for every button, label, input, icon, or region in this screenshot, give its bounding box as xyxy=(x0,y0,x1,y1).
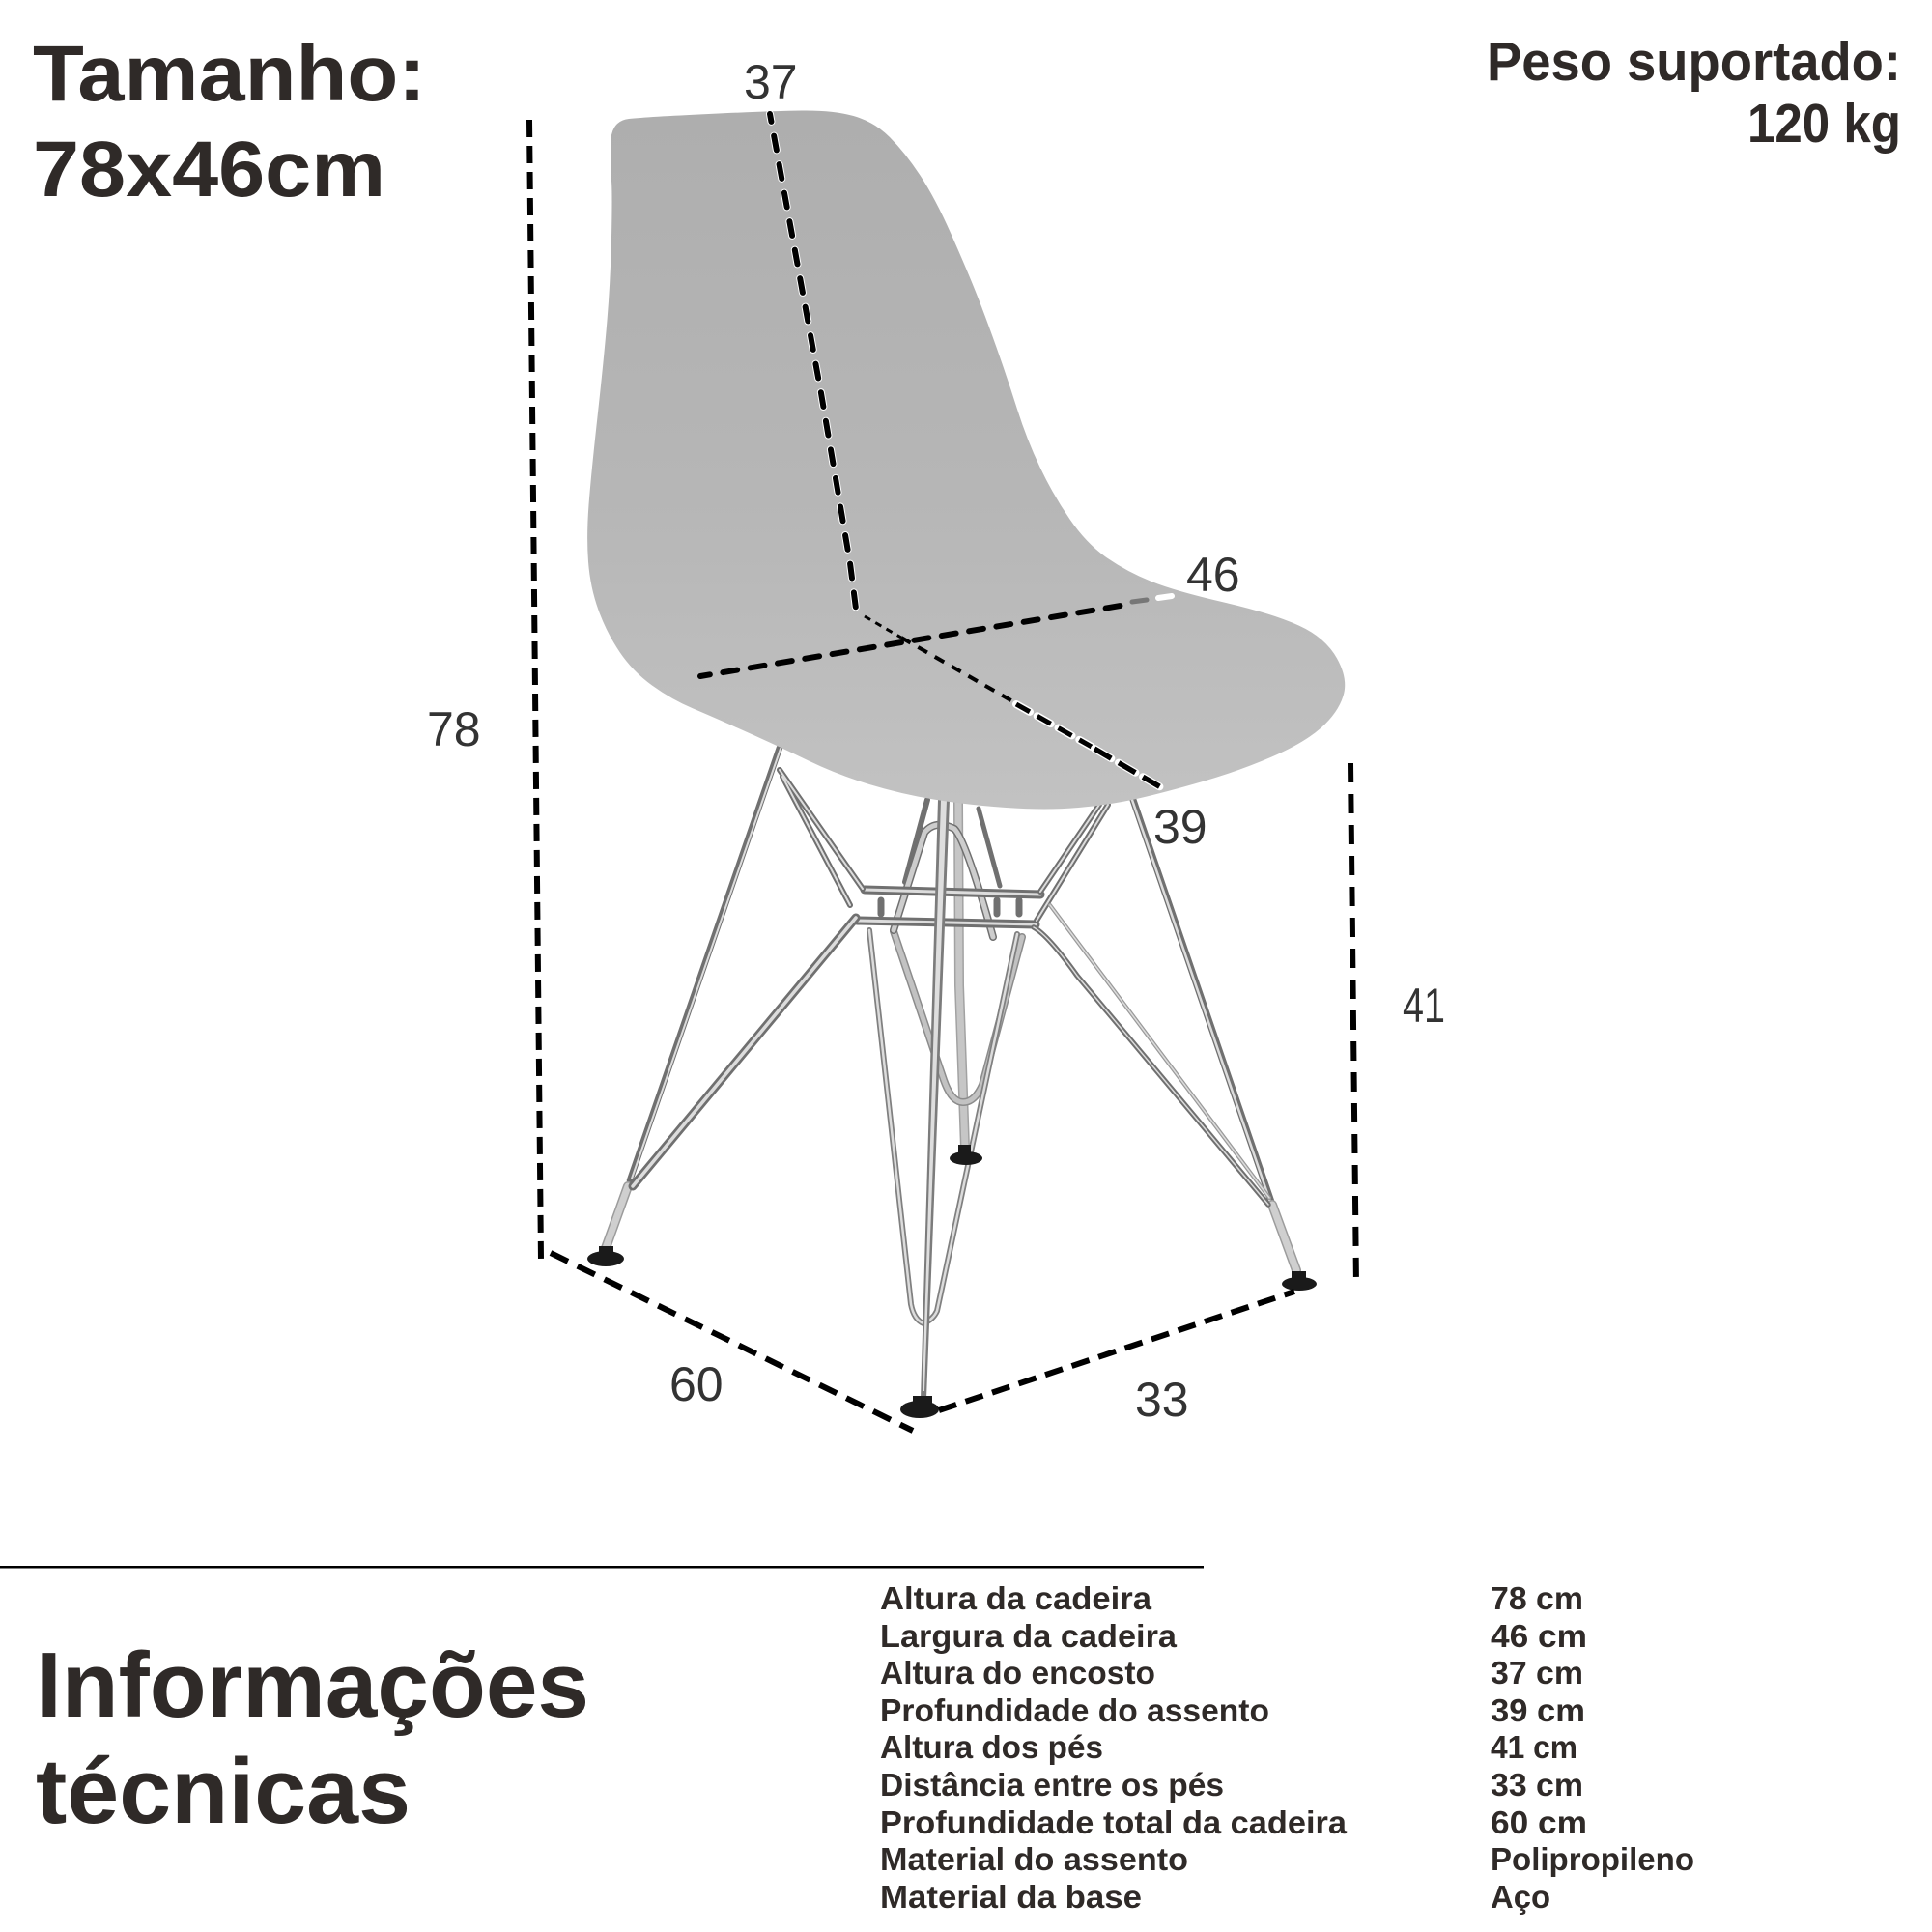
spec table labels: Altura do encosto xyxy=(880,1655,1155,1690)
title: tamanho xyxy=(33,30,426,213)
left upper strut xyxy=(780,770,863,905)
spec table values: 41 cm xyxy=(1491,1729,1577,1765)
dimension labels: 46 xyxy=(1186,548,1240,602)
spec table labels: Altura da cadeira xyxy=(880,1580,1152,1616)
spec table values: Polipropileno xyxy=(1491,1841,1694,1877)
spec table values xyxy=(1491,1580,1694,1915)
dimension labels: 39 xyxy=(1153,800,1208,854)
spec table labels: Material da base xyxy=(880,1879,1142,1915)
spec table values: 78 cm xyxy=(1491,1580,1583,1616)
dimension labels: 78 xyxy=(427,702,481,756)
rear leg xyxy=(958,802,965,1148)
dimension line: profundidade 39 xyxy=(865,616,1164,789)
heading: peso suportado: Peso suportado: xyxy=(1487,31,1901,93)
heading: peso suportado xyxy=(1487,31,1901,155)
feet xyxy=(587,1145,1317,1418)
left lower strut xyxy=(633,918,856,1186)
right lower struts xyxy=(1034,905,1269,1205)
dimension line: altura do encosto 37 xyxy=(770,114,856,609)
dimension line: distancia 33 xyxy=(939,1292,1294,1410)
left outer leg xyxy=(606,748,781,1248)
spec table values: 46 cm xyxy=(1491,1618,1587,1654)
dimension line: largura 46 xyxy=(700,596,1172,676)
seat ring xyxy=(857,890,1040,924)
spec table labels: Profundidade do assento xyxy=(880,1692,1269,1728)
dimension labels: 41 xyxy=(1403,979,1445,1033)
spec table values: 37 cm xyxy=(1491,1655,1583,1690)
rear v struts xyxy=(894,809,1022,1102)
spec table labels: Material do assento xyxy=(880,1841,1188,1877)
right upper strut xyxy=(1037,805,1108,921)
spec table values: 39 cm xyxy=(1491,1692,1585,1728)
heading: peso suportado: 120 kg xyxy=(1747,93,1901,155)
right outer leg xyxy=(1132,800,1296,1270)
dimension labels: 60 xyxy=(669,1357,724,1411)
front hairpin xyxy=(869,930,1017,1323)
dimension line: profundidade total 60 xyxy=(551,1253,913,1431)
dimension line: altura 78 xyxy=(529,120,541,1260)
heading: informacoes tecnicas: técnicas xyxy=(36,1740,411,1843)
upper front strut and hairpin xyxy=(894,800,993,937)
heading: informacoes tecnicas: Informações xyxy=(36,1634,589,1737)
dimension labels: 37 xyxy=(744,55,798,109)
dimension labels: 33 xyxy=(1135,1373,1189,1427)
title: tamanho: Tamanho: xyxy=(33,30,426,118)
spec table labels: Distância entre os pés xyxy=(880,1767,1224,1803)
dimension line: altura dos pes 41 xyxy=(1350,763,1356,1286)
heading: informacoes tecnicas xyxy=(36,1634,589,1843)
spec table labels: Altura dos pés xyxy=(880,1729,1103,1765)
dimension labels xyxy=(427,55,1445,1427)
front leg xyxy=(921,800,950,1399)
chair seat shell xyxy=(587,110,1345,809)
spec table values: 60 cm xyxy=(1491,1804,1587,1840)
title: tamanho: 78x46cm xyxy=(33,126,385,213)
chair base: chrome wire legs xyxy=(587,748,1317,1418)
spec table labels: Profundidade total da cadeira xyxy=(880,1804,1348,1840)
spec table values: 33 cm xyxy=(1491,1767,1583,1803)
spec table labels xyxy=(880,1580,1348,1915)
spec table labels: Largura da cadeira xyxy=(880,1618,1178,1654)
spec table values: Aço xyxy=(1491,1879,1550,1915)
